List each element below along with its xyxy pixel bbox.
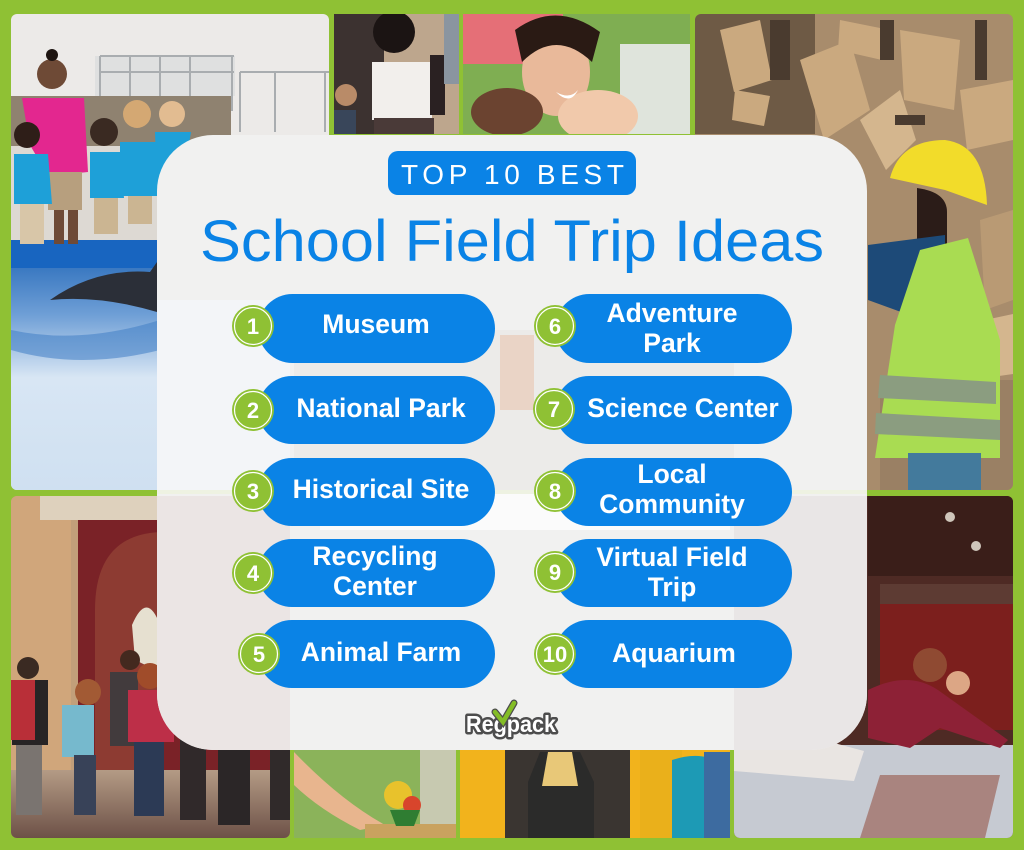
item 10: Aquarium: Aquarium bbox=[612, 638, 736, 668]
item 10: Aquarium: 10 bbox=[543, 642, 567, 667]
item 9: Virtual Field Trip: 9 bbox=[549, 560, 561, 585]
badge: Top 10 Best bbox=[388, 151, 636, 195]
item 3: Historical Site: Historical Site bbox=[293, 474, 469, 504]
item 1: Museum bbox=[232, 294, 495, 363]
item 6: Adventure Park bbox=[534, 294, 792, 363]
item 5: Animal Farm: Animal Farm bbox=[301, 637, 461, 667]
item 8: Local Community: Community bbox=[599, 489, 745, 519]
item 4: Recycling Center: 4 bbox=[247, 561, 260, 586]
item 10: Aquarium bbox=[534, 620, 792, 688]
item 8: Local Community: Local bbox=[637, 459, 707, 489]
item 3: Historical Site: 3 bbox=[247, 479, 259, 504]
item 1: Museum: 1 bbox=[247, 314, 259, 339]
item 5: Animal Farm bbox=[238, 620, 495, 688]
translucent rounded panel bbox=[157, 135, 867, 750]
photo: recycling worker with cardboard bbox=[695, 14, 1013, 490]
item 5: Animal Farm: 5 bbox=[253, 642, 265, 667]
item 9: Virtual Field Trip: Trip bbox=[648, 572, 696, 602]
item 6: Adventure Park: 6 bbox=[549, 314, 561, 339]
item 9: Virtual Field Trip bbox=[534, 539, 792, 607]
title: School Field Trip Ideas bbox=[200, 209, 824, 274]
logo: Regpack: Regpack bbox=[466, 711, 556, 737]
item 8: Local Community: 8 bbox=[549, 479, 561, 504]
item 6: Adventure Park: Adventure bbox=[606, 298, 738, 328]
badge: Top 10 Best: TOP 10 BEST bbox=[401, 159, 624, 190]
photo: students boarding school bus bbox=[460, 750, 730, 838]
item 2: National Park: 2 bbox=[247, 398, 259, 423]
photo: smiling children looking down bbox=[463, 14, 690, 142]
item 2: National Park bbox=[232, 376, 495, 444]
item 4: Recycling Center: Recycling bbox=[312, 541, 438, 571]
item 7: Science Center bbox=[533, 376, 792, 444]
item 6: Adventure Park: Park bbox=[643, 328, 701, 358]
item 9: Virtual Field Trip: Virtual Field bbox=[596, 542, 748, 572]
item 3: Historical Site bbox=[232, 458, 495, 526]
photo: students with backpacks bbox=[334, 11, 459, 134]
photo: children at interactive museum table bbox=[734, 496, 1013, 838]
photo: planting flowers bbox=[294, 750, 456, 838]
photo: museum gallery with students bbox=[11, 496, 290, 838]
item 7: Science Center: Science Center bbox=[587, 393, 779, 423]
item 7: Science Center: 7 bbox=[548, 397, 560, 422]
photo: aquarium trainer, children and dolphin bbox=[11, 14, 330, 490]
item 4: Recycling Center: Center bbox=[333, 571, 417, 601]
item 1: Museum: Museum bbox=[322, 309, 430, 339]
item 8: Local Community bbox=[534, 458, 792, 526]
item 2: National Park: National Park bbox=[296, 393, 466, 423]
item 4: Recycling Center bbox=[232, 539, 495, 607]
